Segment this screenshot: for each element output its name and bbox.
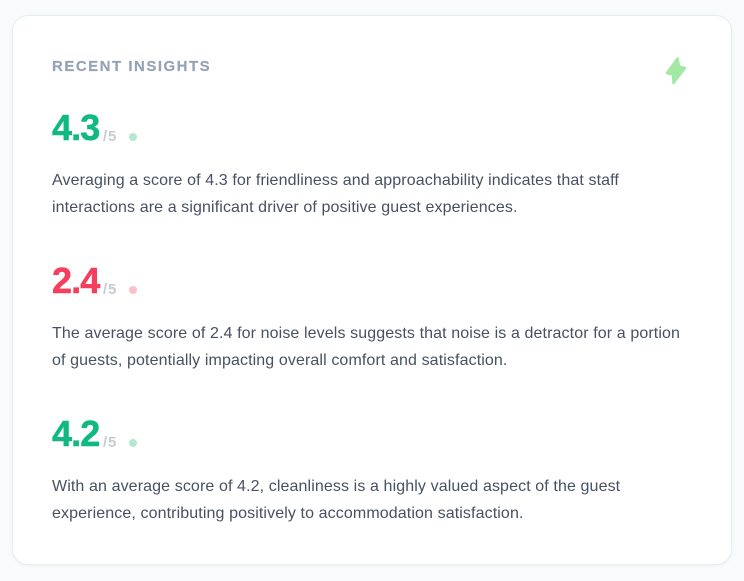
text: friendliness insight: interactions are a significant driver of positive guest experiences. [52,199,518,216]
text: cleanliness insight: With an average score of 4.2, cleanliness is a highly valued aspect of the guest [52,478,620,495]
score: cleanliness 4.2: 4.2 [52,413,99,454]
score denominator: /5 [103,128,117,145]
text: cleanliness insight: experience, contributing positively to accommodation satisfaction. [52,505,524,522]
text: friendliness insight [52,172,619,216]
icon: lightning bolt [666,57,686,84]
text: cleanliness insight [52,478,620,522]
text: noise insight: The average score of 2.4 for noise levels suggests that noise is a detractor for a portion [52,325,680,342]
score denominator: /5 [103,281,117,298]
text: friendliness insight: Averaging a score of 4.3 for friendliness and approachability indicates that staff [52,172,619,189]
score: friendliness 4.3: 4.3 [52,107,99,148]
text: noise insight [52,325,680,369]
score: noise levels 2.4: 2.4 [52,260,99,301]
status dot: negative [129,286,137,294]
heading: recent insights: RECENT INSIGHTS [52,58,211,75]
text: noise insight: of guests, potentially impacting overall comfort and satisfaction. [52,352,508,369]
status dot: positive [129,133,137,141]
status dot: positive [129,439,137,447]
score denominator: /5 [103,434,117,451]
